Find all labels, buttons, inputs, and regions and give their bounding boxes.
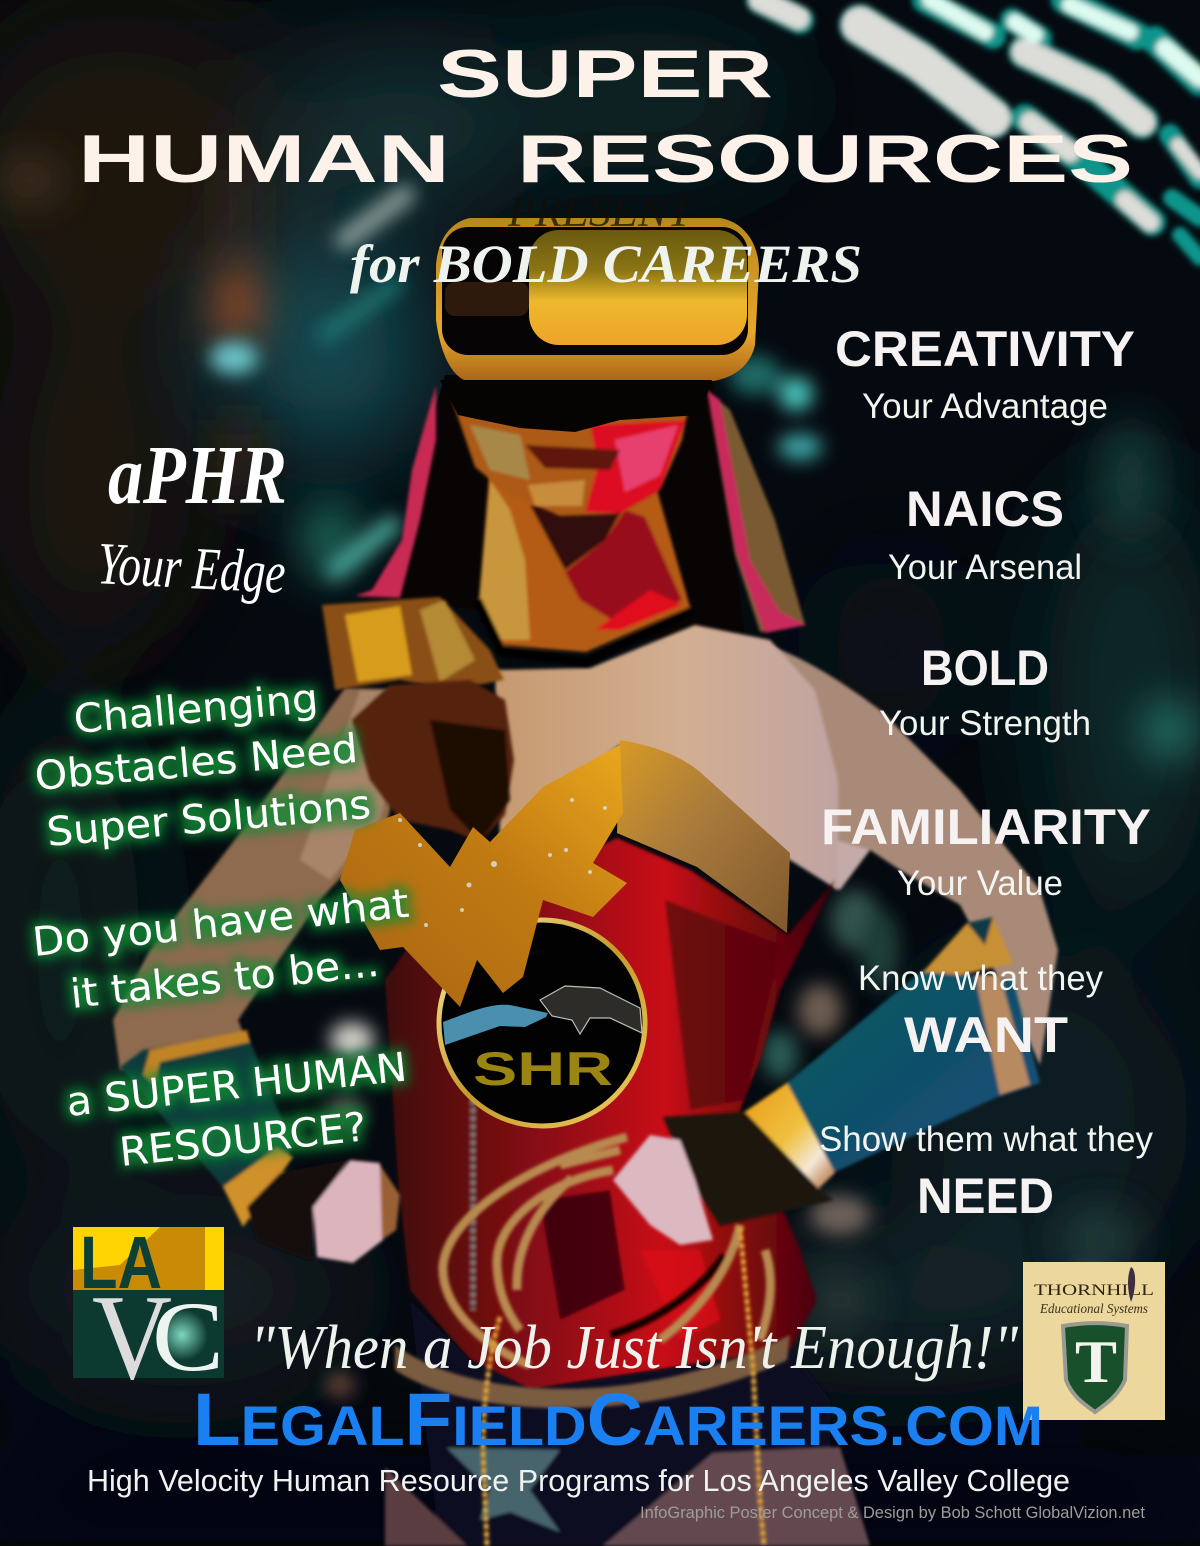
credit line: InfoGraphic Poster Concept & Design by Bob Schott GlobalVizion.net [640,1503,1145,1522]
logo: Thornhill Educational Systems: Educational Systems [1039,1302,1149,1317]
right column: familiarity: Your Value [897,864,1063,903]
visor [529,230,747,345]
right column: want: Know what they [858,959,1103,998]
left slogan: super human resource: RESOURCE? [117,1104,369,1176]
SHR text: SHR [473,1042,613,1095]
figure: woman in hero costume wearing VR headset [113,218,1058,1546]
belt [395,1335,790,1408]
logo: Thornhill Educational Systems: THORNHILL [1034,1282,1154,1299]
right column: creativity [835,321,1135,426]
right column: want: WANT [904,1007,1068,1063]
streak glow layer [760,0,1200,258]
right column: need: Show them what they [819,1120,1153,1159]
right column: need: NEED [917,1168,1054,1224]
left bracer and gauntlet [120,1030,400,1263]
title [78,36,1133,197]
star emblem [340,745,627,1007]
left slogan: do you have what it takes: Do you have what [30,881,411,966]
SHR badge [439,920,645,1126]
right column: NAICS [888,481,1082,587]
strap [440,380,712,432]
logo: LAVC [73,1221,224,1405]
hair edge: right [707,390,806,633]
right column: NAICS: Your Arsenal [888,548,1082,587]
right column: NAICS: NAICS [906,481,1064,537]
right bracer and gauntlet [613,917,1040,1245]
icon: shield [1063,1323,1127,1412]
gold top band [617,740,790,933]
chest [495,625,838,890]
left thigh [385,1467,467,1546]
left slogan: challenging obstacles: Obstacles Need [33,726,360,800]
right thigh [603,1447,870,1546]
hair clump [352,680,514,842]
left slogan: do you have what it takes: it takes to be... [68,940,381,1018]
right column: need [819,1120,1153,1224]
footer line: High Velocity Human Resource Programs for Los Angeles Valley College [87,1463,1070,1498]
logo: LAVC: V [92,1270,172,1405]
corset [385,838,835,1390]
right column: bold [879,640,1091,743]
quote: "When a Job Just Isn't Enough!" [250,1314,1019,1382]
star [447,1448,560,1532]
lower costume [385,1300,870,1546]
left slogan: challenging obstacles: Super Solutions [45,782,373,856]
hair edge: left [355,385,436,598]
left slogan: challenging obstacles [33,676,373,856]
left slogan: super human resource: a SUPER HUMAN [64,1044,409,1126]
headset shell [436,218,759,382]
right column: bold: Your Strength [879,704,1091,743]
right column: creativity: Your Advantage [862,387,1108,426]
neck [477,465,694,662]
right column: familiarity: FAMILIARITY [821,799,1151,855]
subtitle: for BOLD CAREERS [350,234,862,294]
website: LEGALFIELDCAREERS.COM [193,1378,1043,1461]
headset interior [442,227,748,355]
left heading: aPHR Your Edge: aPHR [108,429,287,522]
icon: quill [1128,1267,1135,1302]
left slogan: challenging obstacles: Challenging [72,676,320,743]
logo: Thornhill Educational Systems [1023,1262,1165,1420]
right column: bold: BOLD [921,640,1049,696]
icon: robot hand [540,986,642,1034]
left heading: aPHR Your Edge [96,429,287,606]
face [452,400,690,516]
golden lasso [443,1137,770,1546]
logo: Thornhill Educational Systems: T [1075,1329,1117,1395]
title: SUPER [437,36,773,112]
dark hair behind head [400,375,745,640]
left slogan: do you have what it takes [30,881,411,1018]
left arm [113,688,420,1070]
icon: human hand [443,1005,548,1045]
right column: creativity: CREATIVITY [835,321,1135,377]
right arm [660,636,1058,1065]
title: HUMAN [78,121,450,197]
left heading: aPHR Your Edge: Your Edge [96,530,287,606]
ghost word: present: PRESENT [507,190,695,236]
logo: LAVC: LA [80,1221,162,1304]
shoulder armour [322,597,504,690]
right column: want [858,959,1103,1063]
left slogan: super human resource [64,1044,409,1176]
VR headset [436,218,759,432]
right column: familiarity [821,799,1151,903]
title: RESOURCES [517,121,1133,197]
logo: LAVC: C [152,1281,224,1392]
